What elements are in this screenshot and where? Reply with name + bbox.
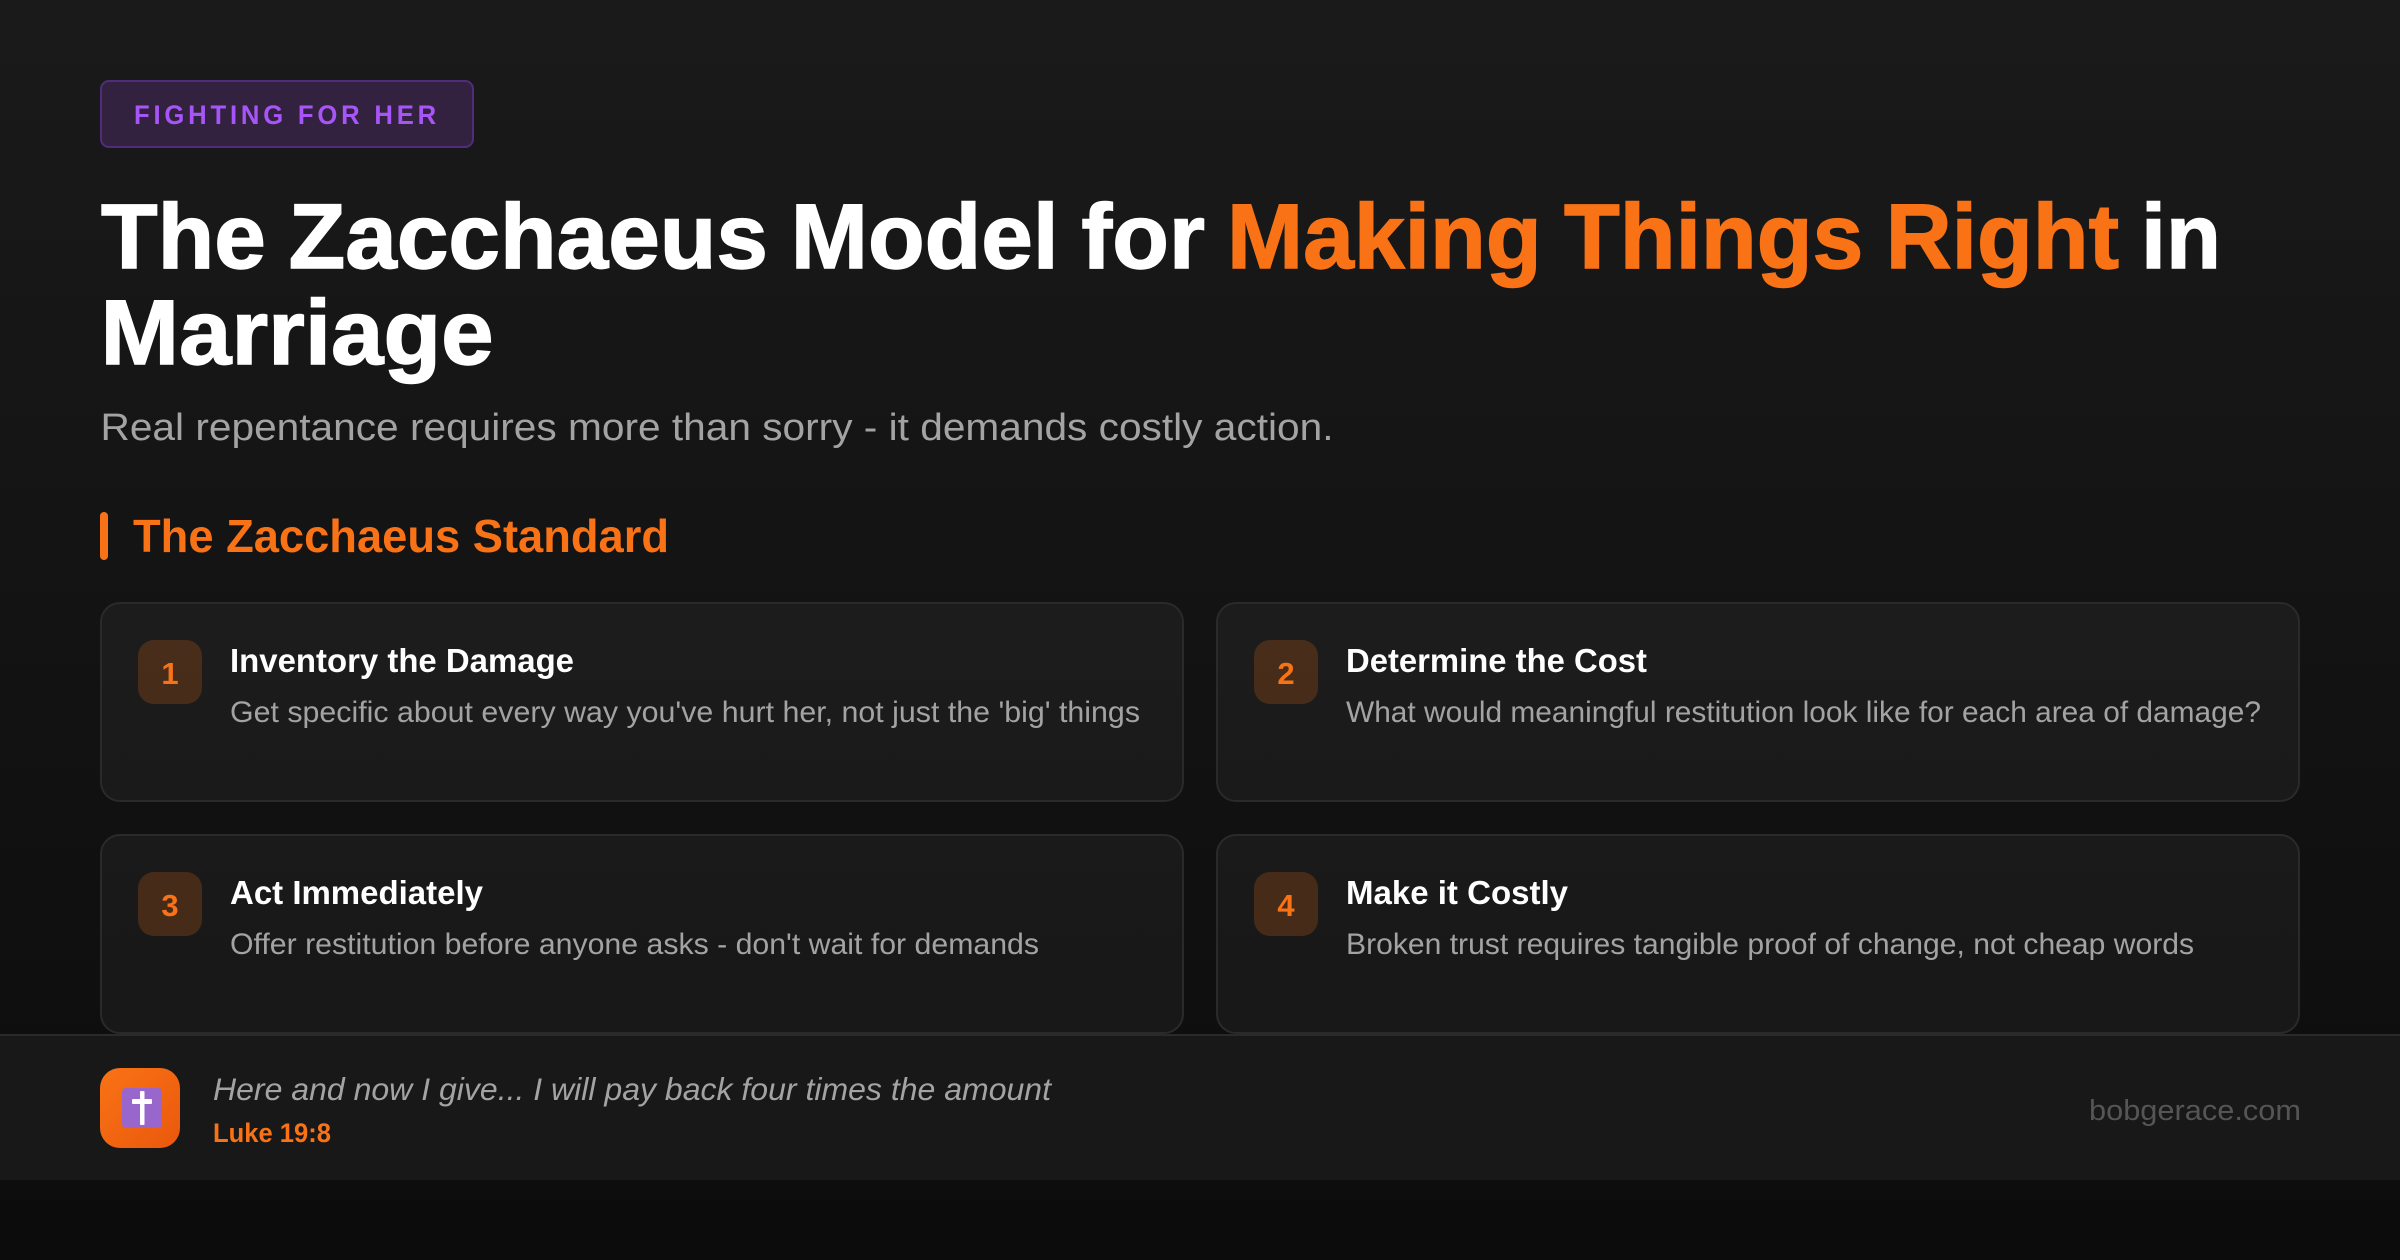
badge: fighting for her — [101, 81, 473, 147]
number badge 1: 1 — [161, 656, 179, 691]
number badge 3 — [138, 872, 202, 936]
card 2: determine the cost — [1217, 603, 2299, 801]
badge: fighting for her: FIGHTING FOR HER — [134, 100, 440, 130]
footer bar — [0, 1034, 2400, 1180]
card 3 title: Act Immediately — [230, 875, 483, 912]
number badge 4 — [1254, 872, 1318, 936]
number badge 4: 4 — [1277, 888, 1295, 923]
title — [100, 186, 2221, 384]
subtitle: Real repentance requires more than sorry - it demands costly action. — [100, 407, 1334, 449]
card 2 title: Determine the Cost — [1346, 643, 1647, 680]
card 2 description: What would meaningful restitution look like for each area of damage? — [1346, 696, 2261, 729]
card 4 description: Broken trust requires tangible proof of change, not cheap words — [1346, 928, 2194, 961]
scripture quote: Here and now I give... I will pay back four times the amount — [213, 1071, 1052, 1107]
icon: cross — [100, 1068, 180, 1148]
title: in — [2141, 186, 2221, 288]
card 3: act immediately — [101, 835, 1183, 1033]
card 1 description: Get specific about every way you've hurt her, not just the 'big' things — [230, 696, 1140, 729]
title: The Zacchaeus Model for — [101, 186, 1205, 288]
number badge 2: 2 — [1277, 656, 1295, 691]
number badge 2 — [1254, 640, 1318, 704]
number badge 1 — [138, 640, 202, 704]
number badge 3: 3 — [161, 888, 179, 923]
card 1 title: Inventory the Damage — [230, 643, 574, 680]
card 4: make it costly — [1217, 835, 2299, 1033]
card 1: inventory the damage — [101, 603, 1183, 801]
card 3 description: Offer restitution before anyone asks - don't wait for demands — [230, 928, 1039, 961]
title: Making Things Right — [1227, 186, 2119, 288]
website: bobgerace.com — [2089, 1095, 2301, 1127]
section heading: The Zacchaeus Standard — [133, 510, 669, 562]
title: Marriage — [100, 282, 494, 384]
scripture reference: Luke 19:8 — [213, 1118, 331, 1148]
card 4 title: Make it Costly — [1346, 875, 1568, 912]
